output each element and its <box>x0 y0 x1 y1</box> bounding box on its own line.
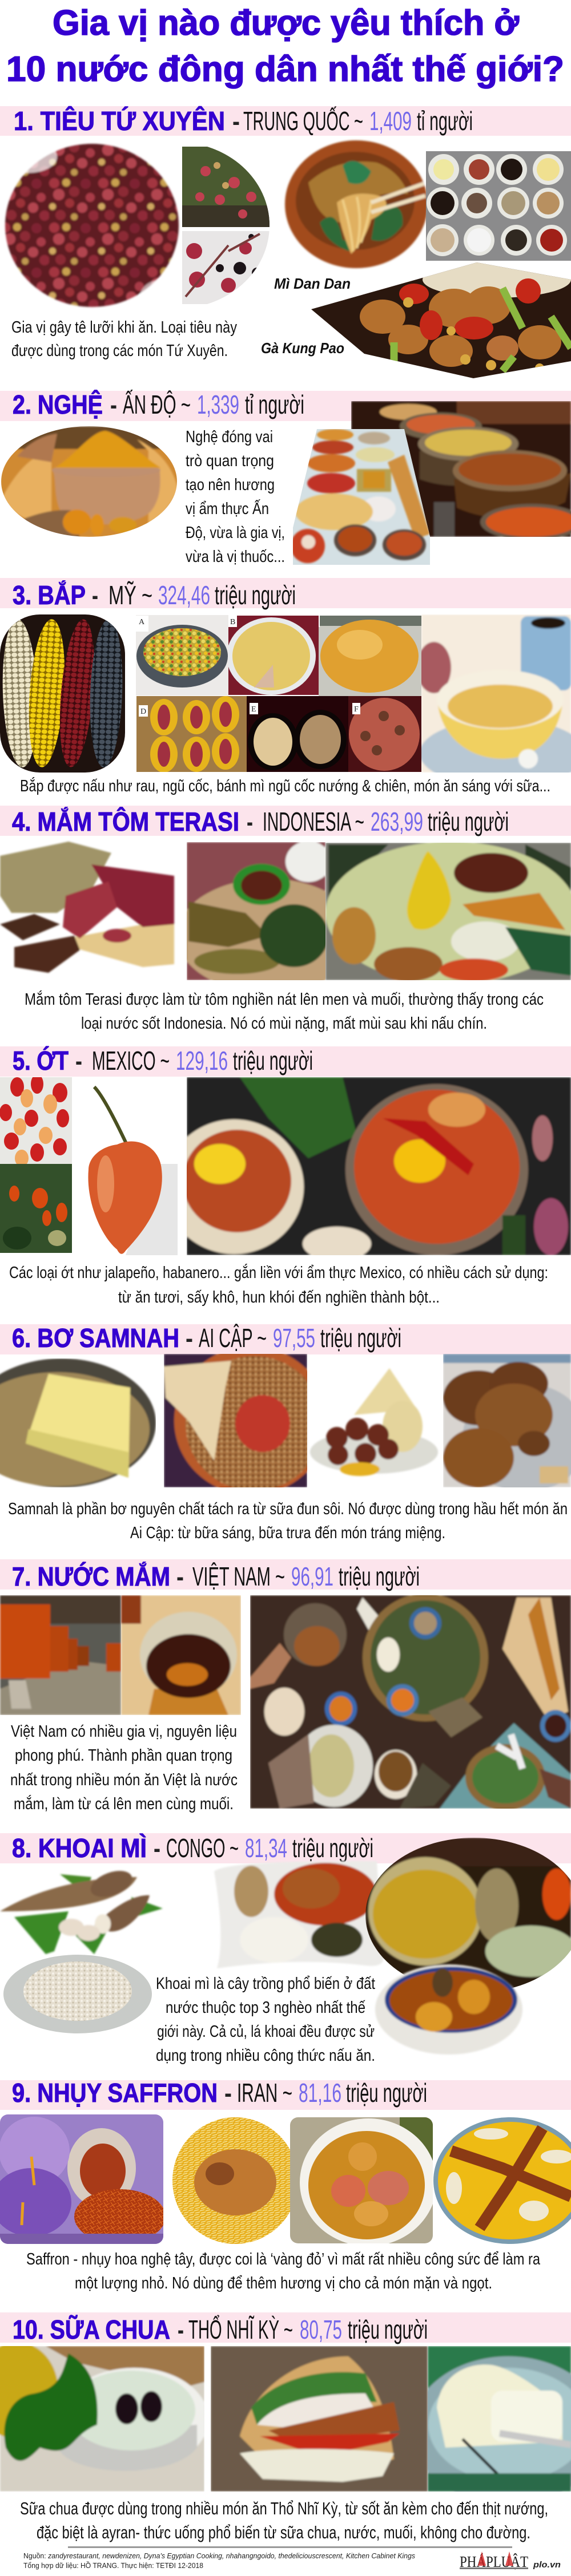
caption 7: phong phú. Thành phần quan trọng <box>15 1746 232 1765</box>
photo: turmeric powder in clay pot <box>0 426 178 539</box>
section 10 heading: Sữa chua: 80,75 <box>300 2315 342 2344</box>
section 2 heading: Nghệ: - <box>110 390 117 419</box>
caption 2: tạo nên hương <box>186 476 275 494</box>
title <box>6 3 564 89</box>
caption 8: Khoai mì là cây trồng phổ biến ở đất <box>156 1975 375 1993</box>
section 4 heading: Mắm tôm Terasi: 4. MẮM TÔM TERASI <box>12 807 239 836</box>
section 10 heading: Sữa chua: triệu người <box>348 2315 428 2344</box>
photo B: corn frittata <box>228 616 319 695</box>
section 2 heading: Nghệ: ẤN ĐỘ ~ <box>123 390 191 419</box>
source credits <box>23 2552 415 2570</box>
section 10 heading: Sữa chua <box>0 2312 571 2344</box>
photo: plate of chicken, rice and plantain <box>214 1861 384 1968</box>
section 4 heading: Mắm tôm Terasi: 263,99 <box>371 807 423 836</box>
section 4 heading: Mắm tôm Terasi: triệu người <box>428 807 509 836</box>
section 1 heading: Tiêu Tứ Xuyên: TRUNG QUỐC ~ <box>243 106 363 136</box>
photo: falafel with sesame <box>443 1354 571 1487</box>
source credits: Nguồn: zandyrestaurant, newdenizen, Dyna's Egyptian Cooking, nhahangngoido, thedeliciouscrescent, Kitchen Cabinet Kings <box>23 2552 415 2560</box>
photo: samnah butter melting <box>0 1358 156 1487</box>
caption 2: Nghệ đóng vai <box>186 428 273 446</box>
section 9 heading: Nhụy saffron: triệu người <box>346 2078 427 2108</box>
section 7 heading: Nước mắm: 96,91 <box>291 1562 333 1591</box>
section 3 heading: Bắp: - <box>92 581 98 610</box>
caption 5: từ ăn tươi, sấy khô, hun khói đến nghiền thành bột... <box>118 1288 440 1307</box>
caption 5 <box>9 1263 548 1307</box>
caption 7: mắm, làm từ cá lên men cùng muối. <box>14 1794 234 1813</box>
photo: Indian buffet pans <box>351 401 571 537</box>
section 8 heading: Khoai mì: 81,34 <box>245 1833 287 1863</box>
photo: saffron flower and threads <box>0 2114 166 2244</box>
photo: Sichuan peppercorns <box>0 141 186 314</box>
photo: kofta with pyramid of rice <box>310 1368 438 1476</box>
caption 9: một lượng nhỏ. Nó dùng để thêm hương vị cho cả món mặn và ngọt. <box>75 2274 492 2292</box>
caption 2: trò quan trọng <box>186 452 274 470</box>
caption 4: loại nước sốt Indonesia. Nó có mùi nặng, mất mùi sau khi nấu chín. <box>81 1014 487 1033</box>
photo: Indian thali spread <box>291 429 430 565</box>
label: Gà Kung Pao: Gà Kung Pao <box>261 339 344 357</box>
photo C: golden bread <box>319 616 421 696</box>
photo: Kung Pao chicken <box>311 261 571 378</box>
caption 1 <box>11 318 237 360</box>
section 5 heading: Ớt: - <box>75 1046 82 1075</box>
section 4 heading: Mắm tôm Terasi: INDONESIA ~ <box>263 807 364 836</box>
photo: peppers on plate and plant <box>0 1077 72 1253</box>
caption 10 <box>20 2498 548 2542</box>
section 2 heading: Nghệ: tỉ người <box>245 390 304 419</box>
caption 8: giới này. Cả củ, lá khoai đều được sử <box>157 2023 375 2041</box>
caption 8: nước thuộc top 3 nghèo nhất thế <box>166 1999 365 2017</box>
section 8 heading: Khoai mì: - <box>154 1834 160 1863</box>
section 8 heading: Khoai mì: 8. KHOAI MÌ <box>12 1833 147 1863</box>
photo: single habanero pepper <box>88 1087 178 1255</box>
caption 4 <box>25 990 544 1033</box>
section 5 heading: Ớt: 129,16 <box>176 1046 228 1075</box>
photo F: meatball casserole <box>348 696 421 772</box>
photo: Vietnamese spread on dark table <box>250 1595 571 1809</box>
caption 6 <box>8 1500 568 1542</box>
section 6 heading: Bơ Samnah: triệu người <box>320 1323 401 1353</box>
section 8 heading: Khoai mì: CONGO ~ <box>166 1833 239 1863</box>
section 2 heading: Nghệ <box>0 390 571 421</box>
photo: Mexican eggs and tortillas <box>187 1077 571 1255</box>
caption 7: nhất trong nhiều món ăn Việt là nước <box>10 1771 238 1789</box>
section 1 heading: Tiêu Tứ Xuyên: tỉ người <box>417 106 473 136</box>
section 9 heading: Nhụy saffron: 81,16 <box>299 2078 341 2108</box>
photo B: corn frittata: B <box>230 618 235 626</box>
photo A: corn salad bowl <box>136 615 228 695</box>
photo: yellow cassava-leaf stew in glass dish <box>365 1838 571 1993</box>
section 7 heading: Nước mắm: VIỆT NAM ~ <box>192 1562 285 1591</box>
section 10 heading: Sữa chua: - <box>178 2315 184 2344</box>
section 1 heading: Tiêu Tứ Xuyên <box>0 106 571 136</box>
caption 8 <box>156 1975 375 2065</box>
section 6 heading: Bơ Samnah: - <box>186 1324 193 1353</box>
section 7 heading: Nước mắm: 7. NƯỚC MẮM <box>12 1562 170 1591</box>
caption 1: Gia vị gây tê lưỡi khi ăn. Loại tiêu này <box>11 318 237 337</box>
photo: sholeh zard saffron pudding <box>433 2117 571 2244</box>
photo F: meatball casserole: F <box>354 705 359 714</box>
section 9 heading: Nhụy saffron: IRAN ~ <box>237 2078 292 2108</box>
caption 8: dụng trong nhiều công thức nấu ăn. <box>156 2047 375 2065</box>
photo: bowl of cereal with milk <box>421 614 571 773</box>
photo: white cheese dessert with fork <box>428 2346 571 2492</box>
source credits: Tổng hợp dữ liệu: HỒ TRANG. Thực hiện: TETĐI 12-2018 <box>23 2561 203 2570</box>
section 9 heading: Nhụy saffron: - <box>224 2078 232 2108</box>
section 8 heading: Khoai mì: triệu người <box>292 1833 373 1863</box>
section 6 heading: Bơ Samnah: 97,55 <box>273 1323 315 1353</box>
section 7 heading: Nước mắm <box>0 1559 571 1591</box>
section 10 heading: Sữa chua: 10. SỮA CHUA <box>13 2315 170 2344</box>
logo: Pháp Luật plo.vn: PHÁPLUẬT <box>460 2553 528 2570</box>
section 7 heading: Nước mắm: - <box>176 1562 184 1591</box>
section 2 heading: Nghệ: 2. NGHỆ <box>13 390 103 419</box>
logo: Pháp Luật plo.vn: plo.vn <box>533 2560 561 2570</box>
section 3 heading: Bắp: 3. BẮP <box>13 580 86 610</box>
photo: koshari with flatbread <box>164 1354 307 1487</box>
section 4 heading: Mắm tôm Terasi <box>0 806 571 836</box>
section 3 heading: Bắp: 324,46 <box>158 580 210 610</box>
section 5 heading: Ớt: 5. ỚT <box>13 1046 69 1075</box>
caption 2: vừa là vị thuốc... <box>186 548 285 566</box>
section 1 heading: Tiêu Tứ Xuyên: 1. TIÊU TỨ XUYÊN <box>14 106 225 136</box>
photo: terasi shrimp paste blocks <box>0 842 174 973</box>
photo: twelve bowls of seasoning <box>426 151 571 261</box>
section 7 heading: Nước mắm: triệu người <box>339 1562 420 1591</box>
section 5 heading: Ớt <box>0 1046 571 1077</box>
photo: glass of fish sauce <box>121 1595 241 1715</box>
caption 2 <box>186 428 285 566</box>
section 2 heading: Nghệ: 1,339 <box>197 390 239 419</box>
section 6 heading: Bơ Samnah <box>0 1323 571 1354</box>
photo: Dan Dan noodles bowl <box>285 140 428 268</box>
photo: bowl of orange stew <box>375 1964 522 2055</box>
section 3 heading: Bắp <box>0 578 571 610</box>
photo E: two bowls of porridge <box>247 696 348 772</box>
photo: fish, greens and sambal plate <box>187 842 325 980</box>
caption 7: Việt Nam có nhiều gia vị, nguyên liệu <box>11 1722 237 1741</box>
photo D: stuffed squash boats: D <box>140 707 146 716</box>
photo: cassava roots and leaves <box>0 1866 163 1954</box>
caption 6: Ai Cập: từ bữa sáng, bữa trưa đến món tráng miệng. <box>130 1524 445 1542</box>
caption 2: vị ẩm thực Ấn <box>186 499 269 518</box>
photo: four coloured corn cobs <box>0 614 125 773</box>
photo: doner kebab with yogurt sauce <box>211 2346 428 2492</box>
section 3 heading: Bắp: MỸ ~ <box>108 580 152 610</box>
section 10 heading: Sữa chua: THỔ NHĨ KỲ ~ <box>188 2315 293 2344</box>
photo: roast chicken on saffron rice <box>172 2117 298 2244</box>
title: Gia vị nào được yêu thích ở <box>53 3 520 43</box>
caption 1: được dùng trong các món Tứ Xuyên. <box>11 342 228 360</box>
title: 10 nước đông dân nhất thế giới? <box>6 50 564 89</box>
label: Mì Dan Dan: Mì Dan Dan <box>274 275 351 292</box>
section 5 heading: Ớt: MEXICO ~ <box>92 1046 170 1075</box>
section 3 heading: Bắp: triệu người <box>215 580 296 610</box>
section 1 heading: Tiêu Tứ Xuyên: 1,409 <box>369 106 412 136</box>
photo E: two bowls of porridge: E <box>251 705 256 714</box>
caption 9 <box>26 2250 541 2292</box>
caption 2: Độ, vừa là gia vị, <box>186 524 285 542</box>
photo: yellow rice cone platter <box>325 843 571 980</box>
section 6 heading: Bơ Samnah: AI CẬP ~ <box>199 1323 267 1353</box>
section 6 heading: Bơ Samnah: 6. BƠ SAMNAH <box>12 1323 179 1353</box>
section 8 heading: Khoai mì <box>0 1833 571 1863</box>
section 9 heading: Nhụy saffron: 9. NHỤY SAFFRON <box>12 2078 218 2108</box>
section 1 heading: Tiêu Tứ Xuyên: - <box>232 107 240 136</box>
section 9 heading: Nhụy saffron <box>0 2078 571 2110</box>
photo: fish sauce barrels <box>0 1595 121 1715</box>
photo: pepper plant branches <box>182 147 270 304</box>
section 4 heading: Mắm tôm Terasi: - <box>247 807 253 836</box>
photo D: stuffed squash boats <box>136 696 247 772</box>
caption 7 <box>10 1722 238 1813</box>
section 5 heading: Ớt: triệu người <box>233 1046 313 1075</box>
photo: tzatziki with olives and basil <box>0 2346 204 2492</box>
photo A: corn salad bowl: A <box>139 618 145 626</box>
photo: saffron soup bowl <box>290 2117 437 2246</box>
photo: cassava flour on a plate <box>3 1955 152 2033</box>
